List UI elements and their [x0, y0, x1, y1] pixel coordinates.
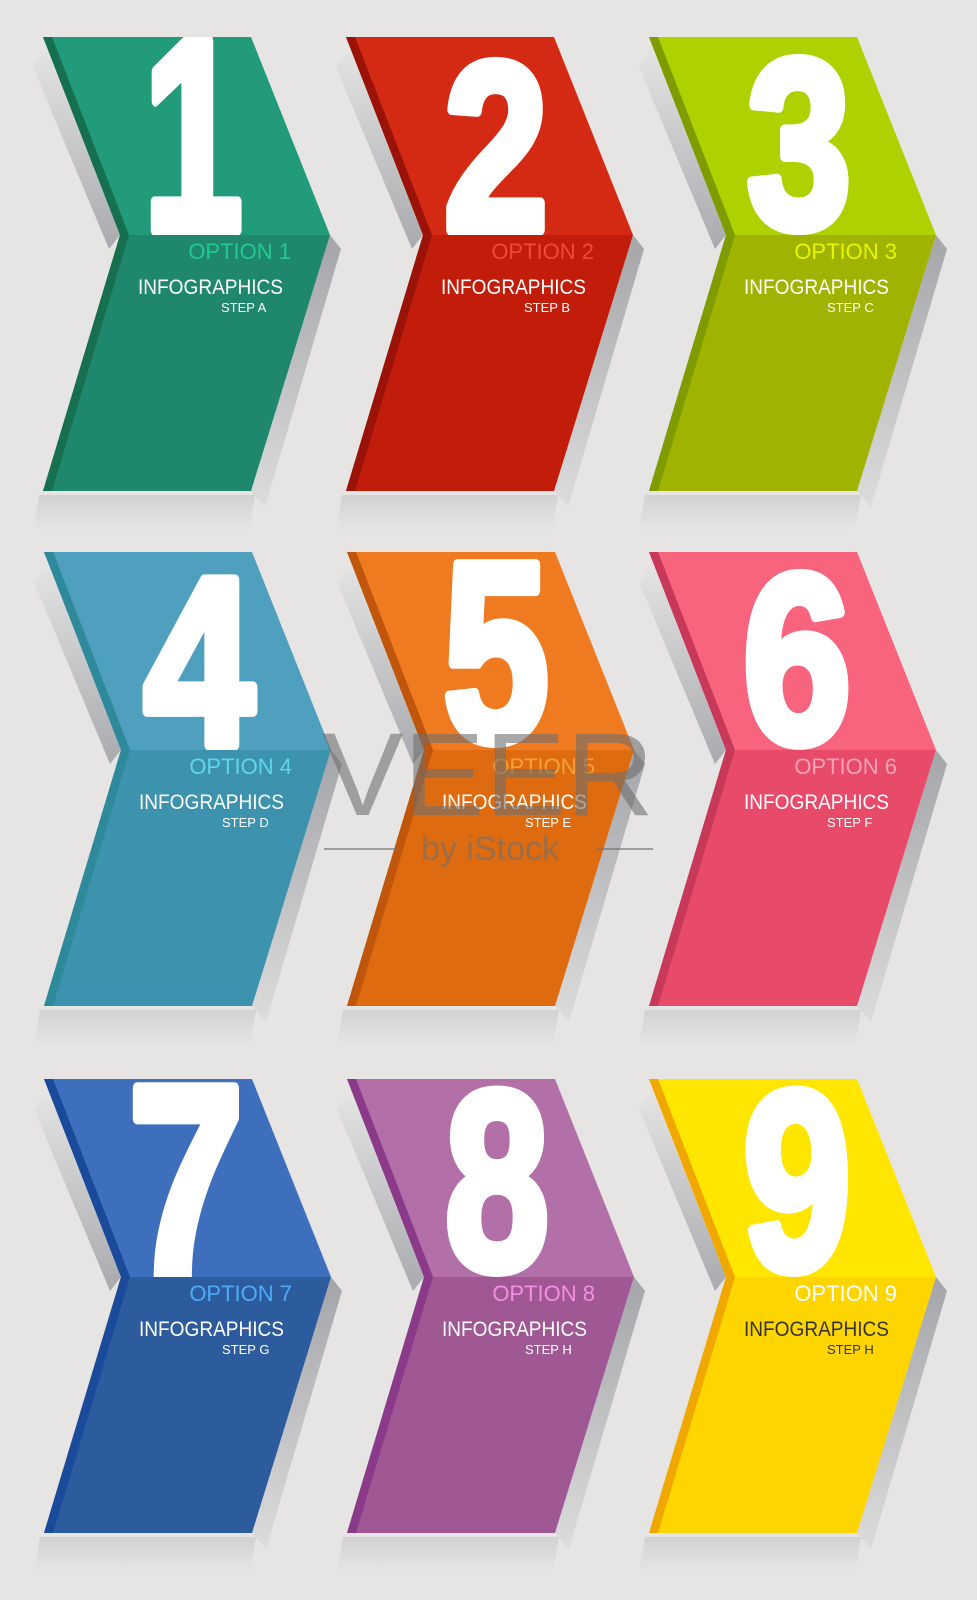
watermark: VEER: [322, 709, 654, 841]
label text 8: OPTION 8: [492, 1281, 595, 1306]
label text 7: STEP G: [222, 1342, 269, 1357]
number 2: 2: [444, 13, 548, 281]
chevron 8: [339, 1079, 645, 1558]
number 5: 5: [443, 510, 549, 795]
number 9: 9: [743, 1039, 851, 1324]
label text 4: OPTION 4: [189, 754, 292, 779]
label text 5: OPTION 5: [492, 754, 595, 779]
label text 9: [744, 1281, 897, 1357]
chevron 1: [35, 37, 341, 516]
chevron 7: [36, 1079, 342, 1558]
label text 8: [442, 1281, 595, 1357]
label text 7: [139, 1281, 292, 1357]
chevron 4: [34, 528, 342, 1046]
chevron 9: [641, 1079, 947, 1558]
label text 3: STEP C: [827, 300, 874, 315]
label text 6: INFOGRAPHICS: [744, 791, 889, 814]
label text 6: OPTION 6: [794, 754, 897, 779]
label text 4: INFOGRAPHICS: [139, 791, 284, 814]
label text 5: INFOGRAPHICS: [442, 791, 587, 814]
label text 7: OPTION 7: [189, 1281, 292, 1306]
chevron 5: [339, 552, 645, 1032]
label text 5: [442, 754, 595, 830]
label text 9: OPTION 9: [794, 1281, 897, 1306]
label text 7: INFOGRAPHICS: [139, 1318, 284, 1341]
number 6: 6: [743, 525, 851, 793]
chevron 3: [639, 10, 947, 531]
label text 4: [139, 754, 292, 830]
number 8: 8: [445, 1039, 549, 1324]
label text 5: STEP E: [525, 815, 571, 830]
chevron 6: [639, 525, 947, 1046]
label text 1: [138, 239, 291, 315]
chevron 2: [336, 13, 644, 531]
label text 1: OPTION 1: [188, 239, 291, 264]
label text 3: OPTION 3: [794, 239, 897, 264]
label text 2: INFOGRAPHICS: [441, 276, 586, 299]
label text 8: INFOGRAPHICS: [442, 1318, 587, 1341]
label text 4: STEP D: [222, 815, 269, 830]
label text 9: INFOGRAPHICS: [744, 1318, 889, 1341]
label text 2: STEP B: [524, 300, 570, 315]
label text 1: STEP A: [221, 300, 267, 315]
number 7: 7: [128, 1029, 244, 1336]
number 3: 3: [747, 10, 851, 278]
label text 6: STEP F: [827, 815, 872, 830]
label text 8: STEP H: [525, 1342, 572, 1357]
label text 3: [744, 239, 897, 315]
label text 2: OPTION 2: [491, 239, 594, 264]
label text 3: INFOGRAPHICS: [744, 276, 889, 299]
label text 2: [441, 239, 594, 315]
label text 6: [744, 754, 897, 830]
watermark: by iStock: [421, 830, 560, 868]
label text 1: INFOGRAPHICS: [138, 276, 283, 299]
label text 9: STEP H: [827, 1342, 874, 1357]
number 4: 4: [144, 528, 254, 796]
